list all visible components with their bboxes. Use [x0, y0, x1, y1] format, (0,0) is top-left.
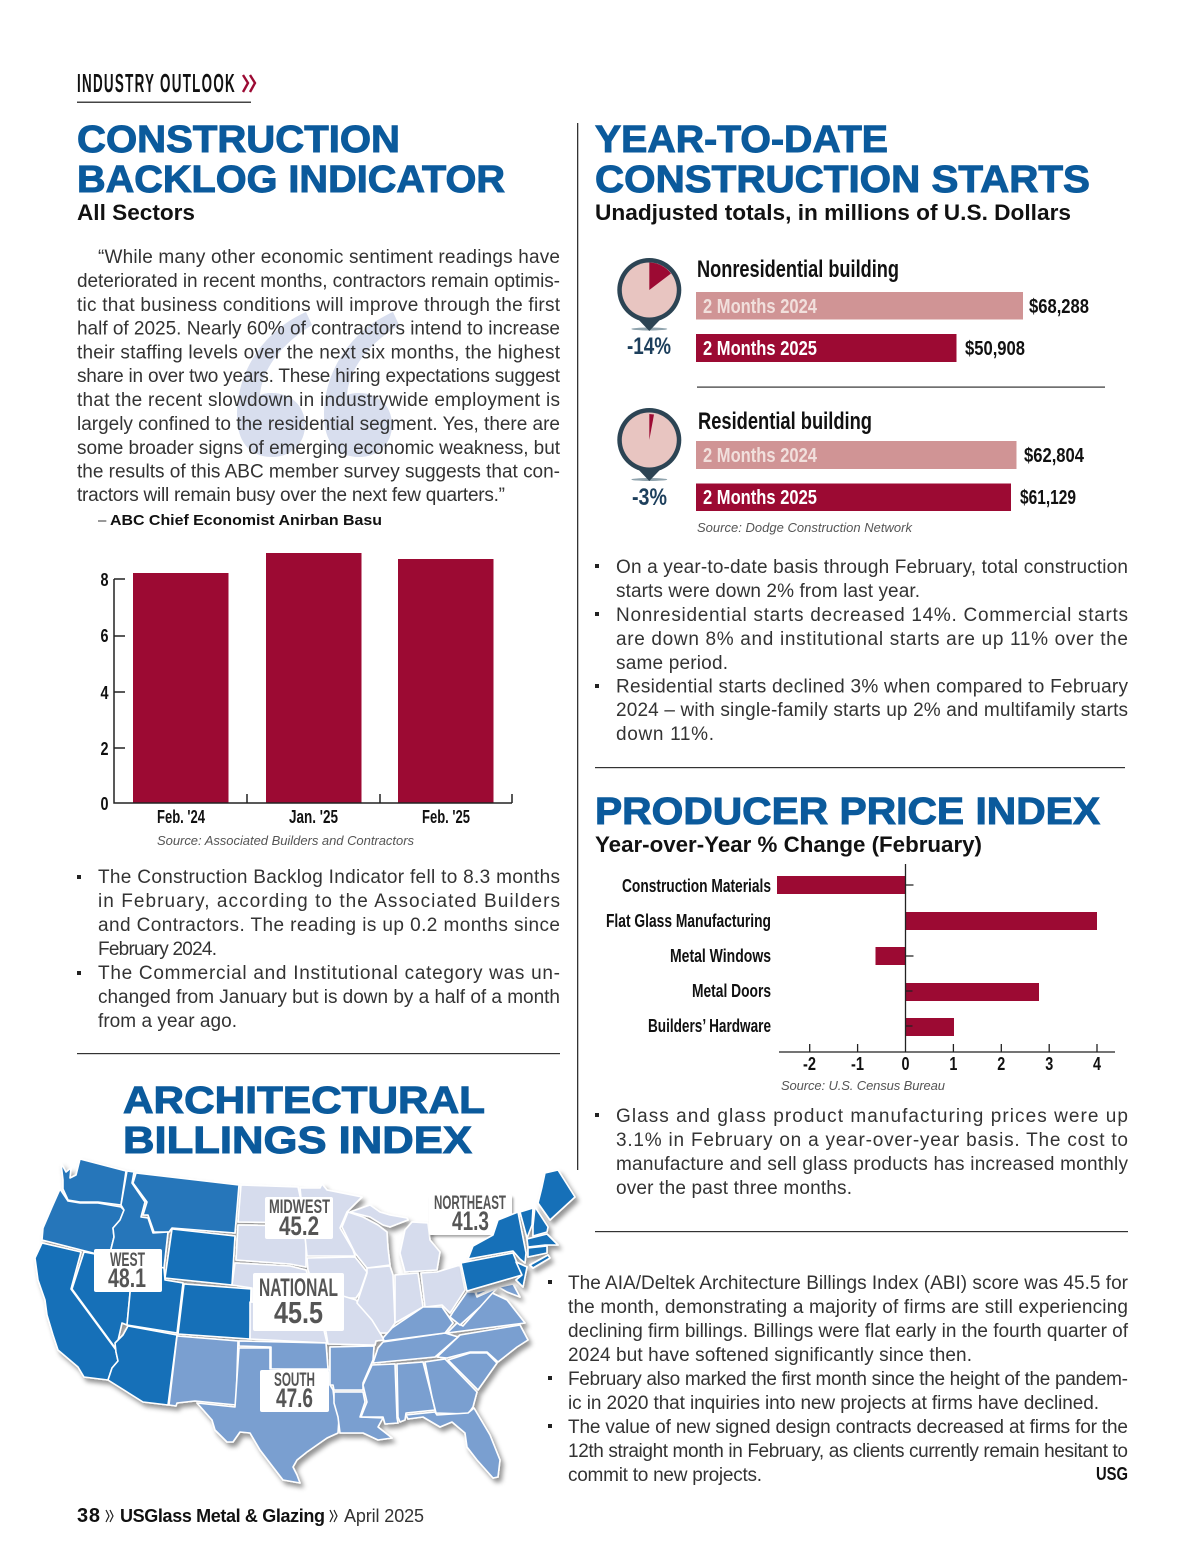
panel: year-to-date construction starts — [595, 119, 1128, 745]
text block: construction starts bullets: starts were down 2% from last year. — [616, 581, 920, 602]
text block: construction starts bullets: Residential starts declined 3% when compared to February — [616, 676, 1128, 698]
text block: economist quote: tractors will remain busy over the next few quarters.” — [77, 485, 505, 506]
heading: year-to-date construction starts: YEAR-TO-DATE — [595, 119, 888, 161]
footer: folio: 38 — [77, 1505, 100, 1527]
chart: nonresidential building: Nonresidential building — [697, 256, 899, 283]
text block: construction starts bullets: Nonresidential starts decreased 14%. Commercial starts — [616, 605, 1128, 626]
footer: folio: April 2025 — [344, 1506, 424, 1526]
text block: construction starts bullets: are down 8% and institutional starts are up 11% over the — [616, 629, 1128, 650]
text block: construction starts bullets: 2024 – with single-family starts up 2% and multifamily starts — [616, 700, 1128, 721]
bar chart: producer price changes: -2 — [803, 1054, 816, 1074]
bar chart: producer price changes: 3 — [1045, 1054, 1053, 1074]
map label: national: NATIONAL — [259, 1274, 338, 1302]
text block: glass prices bullet: 3.1% in February on a year-over-year basis. The cost to — [616, 1130, 1128, 1151]
text block: glass prices bullet — [595, 1106, 1128, 1199]
map label: south: SOUTH — [274, 1370, 315, 1391]
bar chart: producer price changes: Builders’ Hardware — [648, 1016, 771, 1036]
heading: construction backlog indicator — [77, 119, 505, 201]
quote attribution: – — [98, 512, 107, 529]
bar chart: backlog indicator in months: 6 — [100, 626, 108, 646]
text block: backlog bullets: changed from January but is down by a half of a month — [98, 987, 560, 1008]
text block: glass prices bullet: over the past three months. — [616, 1178, 852, 1199]
text block: glass prices bullet: Glass and glass product manufacturing prices were up — [616, 1106, 1128, 1127]
chart: nonresidential building — [617, 256, 1089, 362]
text block: backlog bullets: from a year ago. — [98, 1011, 237, 1032]
subheading: unadjusted totals: Unadjusted totals, in millions of U.S. Dollars — [595, 200, 1071, 225]
footer: folio — [77, 1505, 424, 1527]
map region: northeast states — [461, 1170, 575, 1291]
bar chart: producer price changes: Flat Glass Manufacturing — [606, 911, 771, 931]
text block: glass prices bullet: manufacture and sell glass products has increased monthly — [616, 1154, 1128, 1175]
map label: south: 47.6 — [276, 1383, 313, 1413]
footer: folio: USGlass Metal & Glazing — [120, 1506, 325, 1526]
map label: west: 48.1 — [108, 1263, 146, 1293]
map: United States by region — [35, 1159, 575, 1483]
bar chart: producer price changes: 4 — [1093, 1054, 1101, 1074]
bar chart: backlog indicator in months: 8 — [100, 570, 108, 590]
end mark: USG: USG — [1096, 1464, 1128, 1484]
heading: construction backlog indicator: CONSTRUCTION — [77, 119, 400, 161]
chart: residential building — [617, 408, 1085, 511]
chart: residential building: 2 Months 2025 — [703, 487, 817, 509]
text block: architecture billings bullets: commit to new projects. — [568, 1465, 762, 1486]
heading: year-to-date construction starts: CONSTRUCTION STARTS — [595, 159, 1090, 201]
map label: south — [260, 1370, 329, 1413]
text block: construction starts bullets — [595, 557, 1128, 745]
text block: backlog bullets: The Commercial and Institutional category was un- — [98, 963, 560, 984]
text block: economist quote: largely confined to the residential segment. Yes, there are — [77, 414, 560, 435]
map label: midwest: 45.2 — [279, 1211, 319, 1241]
bar chart: backlog indicator in months: Source: Associated Builders and Contractors — [157, 833, 414, 848]
text block: architecture billings bullets: 12th straight month in February, as clients currently remain hesitant to — [568, 1441, 1128, 1462]
chart: residential building: 2 Months 2024 — [703, 445, 818, 467]
text block: backlog bullets: February 2024. — [98, 939, 217, 960]
chart: nonresidential building: $50,908 — [965, 338, 1025, 360]
text block: architecture billings bullets: the month, demonstrating a majority of firms are still experiencing — [568, 1297, 1128, 1318]
text block: architecture billings bullets: The value of new signed design contracts decreased at firms for the — [568, 1417, 1128, 1438]
text block: economist quote: some broader signs of emerging economic weakness, but — [77, 438, 561, 459]
chart: residential building: $61,129 — [1020, 487, 1076, 509]
icon: residential pie pin: -3% — [632, 484, 667, 511]
bar chart: producer price changes: 0 — [902, 1054, 910, 1074]
text block: backlog bullets: The Construction Backlog Indicator fell to 8.3 months — [98, 867, 560, 888]
text block: architecture billings bullets: February also marked the first month since the height of the pandem- — [568, 1369, 1128, 1390]
bar chart: producer price changes: -1 — [851, 1054, 864, 1074]
section header: Industry Outlook: INDUSTRY OUTLOOK — [77, 68, 236, 98]
bar chart: backlog indicator in months: 0 — [100, 794, 108, 814]
chart: residential building: $62,804 — [1024, 445, 1085, 467]
text block: economist quote: share in over two years. These hiring expectations suggest — [77, 366, 561, 387]
heading: architectural billings index: ARCHITECTURAL — [123, 1080, 485, 1122]
map label: national: 45.5 — [274, 1295, 323, 1330]
text block: construction starts bullets: down 11%. — [616, 724, 714, 745]
heading: producer price index: PRODUCER PRICE INDEX — [595, 791, 1101, 833]
bar chart: producer price changes: 2 — [997, 1054, 1005, 1074]
text block: economist quote: that the recent slowdown in industrywide employment is — [77, 390, 560, 411]
icon: decorative quote mark — [237, 312, 399, 457]
heading: architectural billings index — [123, 1080, 485, 1162]
heading: architectural billings index: BILLINGS INDEX — [123, 1120, 473, 1162]
bar chart: backlog indicator in months: 2 — [100, 739, 108, 759]
bar chart: backlog indicator in months: Feb. '24 — [157, 807, 205, 827]
map label: midwest: MIDWEST — [269, 1197, 330, 1218]
text block: economist quote: “While many other economic sentiment readings have — [98, 247, 560, 268]
text block: construction starts bullets: On a year-to-date basis through February, total construction — [616, 557, 1128, 578]
bar chart: producer price changes — [606, 864, 1115, 1093]
icon: nonresidential pie pin — [617, 258, 681, 360]
chart: nonresidential building: 2 Months 2024 — [703, 296, 818, 318]
text block: architecture billings bullets: The AIA/Deltek Architecture Billings Index (ABI) score was 45.5 for — [568, 1273, 1129, 1294]
map label: national — [253, 1273, 344, 1331]
heading: year-to-date construction starts — [595, 119, 1090, 201]
text block: economist quote: half of 2025. Nearly 60% of contractors intend to increase — [77, 318, 560, 340]
subheading: year-over-year change: Year-over-Year % Change (February) — [595, 832, 982, 857]
bar chart: producer price changes: Metal Doors — [692, 981, 771, 1001]
map label: midwest — [265, 1197, 333, 1241]
icon: residential pie pin — [617, 408, 681, 511]
bar chart: backlog indicator in months: Feb. '25 — [422, 807, 470, 827]
bar chart: producer price changes: Metal Windows — [670, 946, 771, 966]
bar chart: producer price changes: Construction Materials — [622, 876, 771, 896]
text block: architecture billings bullets: 2024 but have softened significantly since then. — [568, 1345, 972, 1366]
text block: economist quote: tic that business conditions will improve through the first — [77, 295, 561, 316]
section header: Industry Outlook — [77, 68, 255, 103]
panel: architectural billings index — [35, 1080, 1129, 1486]
bar chart: backlog indicator in months: Jan. '25 — [289, 807, 338, 827]
panel: construction backlog indicator — [77, 119, 561, 1032]
bar chart: producer price changes: Source: U.S. Census Bureau — [781, 1078, 945, 1093]
quote attribution: ABC Chief Economist Anirban Basu — [110, 512, 382, 529]
heading: construction backlog indicator: BACKLOG INDICATOR — [77, 159, 505, 201]
text block: backlog bullets: in February, according to the Associated Builders — [98, 891, 560, 912]
icon: nonresidential pie pin: -14% — [627, 333, 671, 360]
text block: construction starts bullets: same period. — [616, 653, 728, 674]
map label: west — [94, 1249, 162, 1293]
map label: northeast — [429, 1193, 512, 1236]
text block: economist quote — [77, 247, 561, 506]
text block: economist quote: deteriorated in recent months, contractors remain optimis- — [77, 271, 560, 292]
map label: west: WEST — [110, 1250, 145, 1271]
text block: economist quote: their staffing levels over the next six months, the highest — [77, 342, 561, 364]
map label: northeast: 41.3 — [452, 1206, 489, 1236]
text block: backlog bullets: and Contractors. The reading is up 0.2 months since — [98, 915, 560, 936]
panel: producer price index — [595, 791, 1128, 1199]
source note: Dodge: Source: Dodge Construction Network — [697, 520, 914, 535]
chart: nonresidential building: 2 Months 2025 — [703, 338, 817, 360]
chart: residential building: Residential building — [698, 408, 872, 435]
text block: architecture billings bullets: declining firm billings. Billings were flat early in the fourth quarter of — [568, 1321, 1129, 1342]
text block: architecture billings bullets — [548, 1273, 1129, 1486]
text block: backlog bullets — [77, 867, 560, 1032]
chart: nonresidential building: $68,288 — [1029, 296, 1089, 318]
bar chart: backlog indicator in months — [100, 553, 512, 848]
subheading: all sectors: All Sectors — [77, 200, 195, 225]
text block: architecture billings bullets: ic in 2020 that inquiries into new projects at firms have declined. — [568, 1393, 1099, 1414]
bar chart: producer price changes: 1 — [949, 1054, 957, 1074]
text block: economist quote: the results of this ABC member survey suggests that con- — [77, 462, 560, 482]
bar chart: backlog indicator in months: 4 — [100, 683, 108, 703]
map label: northeast: NORTHEAST — [434, 1193, 506, 1214]
